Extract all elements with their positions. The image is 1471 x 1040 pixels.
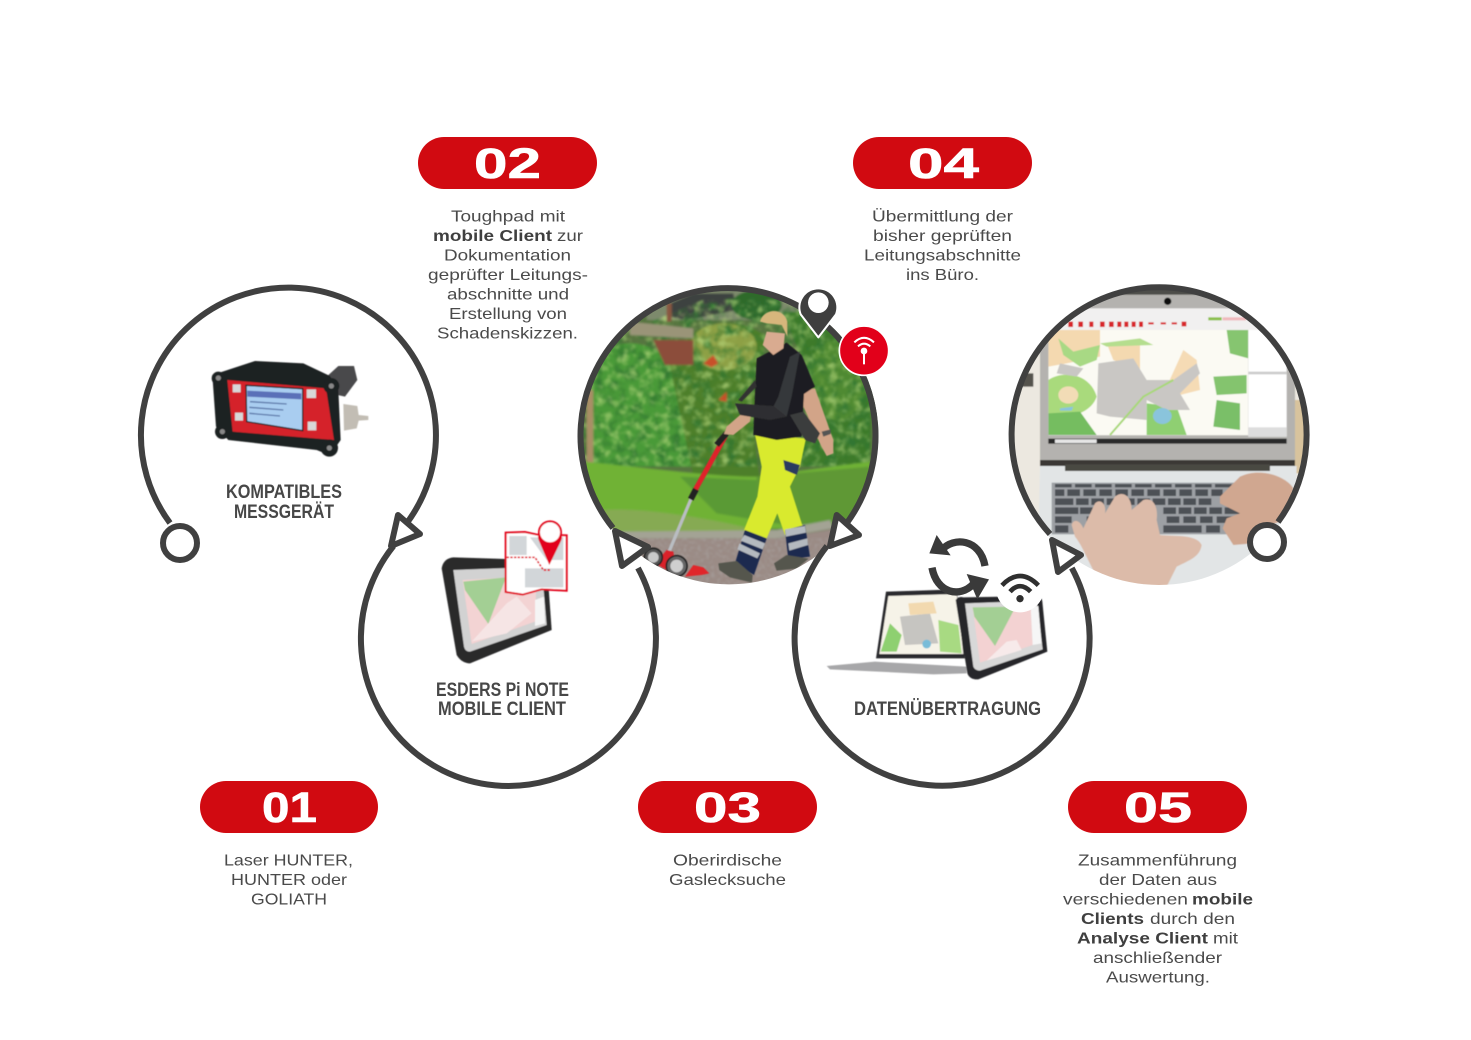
text block: step 05: durch den <box>1150 911 1235 928</box>
text block: step 04: Übermittlung der <box>872 208 1014 226</box>
map overlay <box>506 532 567 595</box>
green area on map <box>463 577 506 624</box>
step 5 loop around laptop photo with end ring <box>1012 287 1307 559</box>
text block: step 02: Toughpad mit <box>451 208 566 226</box>
text block: step 05: Zusammenführung <box>1078 852 1237 870</box>
taskbar <box>1048 439 1287 444</box>
text block: step 05: Analyse Client <box>1077 930 1209 948</box>
icon: location pin <box>799 288 837 337</box>
tablet <box>956 596 1047 679</box>
tablet screen <box>453 567 547 652</box>
text block: step 05: mit <box>1213 930 1239 948</box>
text block: step 01 <box>224 852 353 908</box>
tablet body <box>442 557 552 663</box>
device label: kompatibles messgerät: KOMPATIBLES <box>226 481 342 503</box>
arrow: step 1 to step 2 <box>391 515 420 546</box>
step 1 loop with start ring <box>141 288 436 560</box>
text block: step 05: anschließender <box>1093 950 1223 967</box>
red map pin <box>538 524 562 565</box>
text block: step 04: bisher geprüften <box>873 228 1012 245</box>
text block: step 02: Erstellung von <box>449 306 567 323</box>
text block: step 05: mobile <box>1192 892 1253 908</box>
deck <box>1040 465 1298 584</box>
text block: step 05 <box>1063 852 1253 986</box>
instrument body <box>212 361 341 455</box>
text block: step 02: Dokumentation <box>444 248 571 264</box>
laptop <box>876 589 965 658</box>
text block: step 02: zur <box>557 228 584 245</box>
map on screen <box>1048 330 1248 435</box>
text block: step 04: ins Büro. <box>906 267 979 284</box>
display <box>246 385 303 431</box>
person <box>644 311 833 583</box>
function keys <box>233 384 316 430</box>
text block: step 02: mobile Client <box>433 228 553 245</box>
end ring <box>1250 525 1284 559</box>
device: laptop and tablet with sync and wifi icons <box>827 535 1047 679</box>
text block: step 02: geprüfter Leitungs- <box>428 267 588 284</box>
text block: step 01: HUNTER oder <box>231 872 348 889</box>
detector stick <box>644 433 727 577</box>
badge 05 <box>1068 781 1247 833</box>
text block: step 04 <box>864 208 1021 284</box>
arrow: step 2 to step 3 <box>615 531 648 566</box>
sidebar <box>1248 330 1287 437</box>
photo background <box>584 316 878 538</box>
loop arc 5 <box>1012 287 1307 534</box>
arrow: step 3 to step 4 <box>830 515 859 546</box>
photo: laptop with map and typing hands <box>1014 290 1304 585</box>
badge 01: 01 <box>262 784 317 832</box>
sensor cylinder <box>327 366 357 397</box>
text block: step 05: Auswertung. <box>1106 970 1210 986</box>
device label: esders pi note: ESDERS Pi NOTE <box>436 679 569 701</box>
badge 03: 03 <box>694 784 761 832</box>
text block: step 03: Gaslecksuche <box>669 872 786 889</box>
badge 04 <box>853 137 1032 189</box>
icon: location pin and signal badge <box>799 288 889 375</box>
corner screws <box>216 375 334 451</box>
icon: signal badge <box>839 326 889 375</box>
badge 05: 05 <box>1124 784 1192 832</box>
badge 02 <box>418 137 597 189</box>
icon: sync arrows <box>929 535 989 599</box>
toolbar with red icons <box>1048 308 1287 330</box>
red face <box>227 380 334 440</box>
sensor nozzle <box>343 404 368 431</box>
text block: step 03 <box>669 852 786 889</box>
loop arc 1 <box>141 288 436 528</box>
keyboard keys <box>1055 484 1241 533</box>
badge 02: 02 <box>474 140 541 188</box>
step 4 loop <box>795 546 1090 786</box>
badge 04: 04 <box>908 140 979 188</box>
text block: step 01: Laser HUNTER, <box>224 852 353 870</box>
text block: step 04: Leitungsabschnitte <box>864 248 1021 264</box>
text block: step 05: verschiedenen <box>1063 892 1188 908</box>
text block: step 05: Clients <box>1081 911 1144 928</box>
device label: kompatibles messgerät <box>226 481 342 523</box>
corner bumpers <box>212 372 339 457</box>
text block: step 03: Oberirdische <box>673 852 782 870</box>
device label: kompatibles messgerät: MESSGERÄT <box>234 500 334 523</box>
badge 03 <box>638 781 817 833</box>
desk background <box>1014 353 1300 514</box>
text block: step 02 <box>428 208 588 342</box>
badge 01 <box>200 781 378 833</box>
laptop lid <box>1040 293 1295 467</box>
arrow: step 4 to step 5 <box>1052 540 1081 572</box>
start ring <box>163 526 197 560</box>
device: compatible measuring instrument <box>212 361 368 457</box>
text block: step 01: GOLIATH <box>251 892 327 908</box>
device label: datenübertragung: DATENÜBERTRAGUNG <box>854 697 1041 720</box>
device: rugged tablet with map and red pin <box>442 521 567 663</box>
hands <box>1072 494 1202 587</box>
device label: esders pi note: MOBILE CLIENT <box>438 698 566 720</box>
device label: esders pi note <box>436 679 569 720</box>
photo: technician walking with gas detector <box>584 291 878 584</box>
text block: step 02: abschnitte und <box>447 286 569 304</box>
step 3 loop around photo <box>580 288 876 528</box>
icon: wifi <box>996 564 1044 612</box>
text block: step 02: Schadenskizzen. <box>437 326 578 342</box>
step 2 loop <box>361 546 656 786</box>
text block: step 05: der Daten aus <box>1099 872 1217 889</box>
